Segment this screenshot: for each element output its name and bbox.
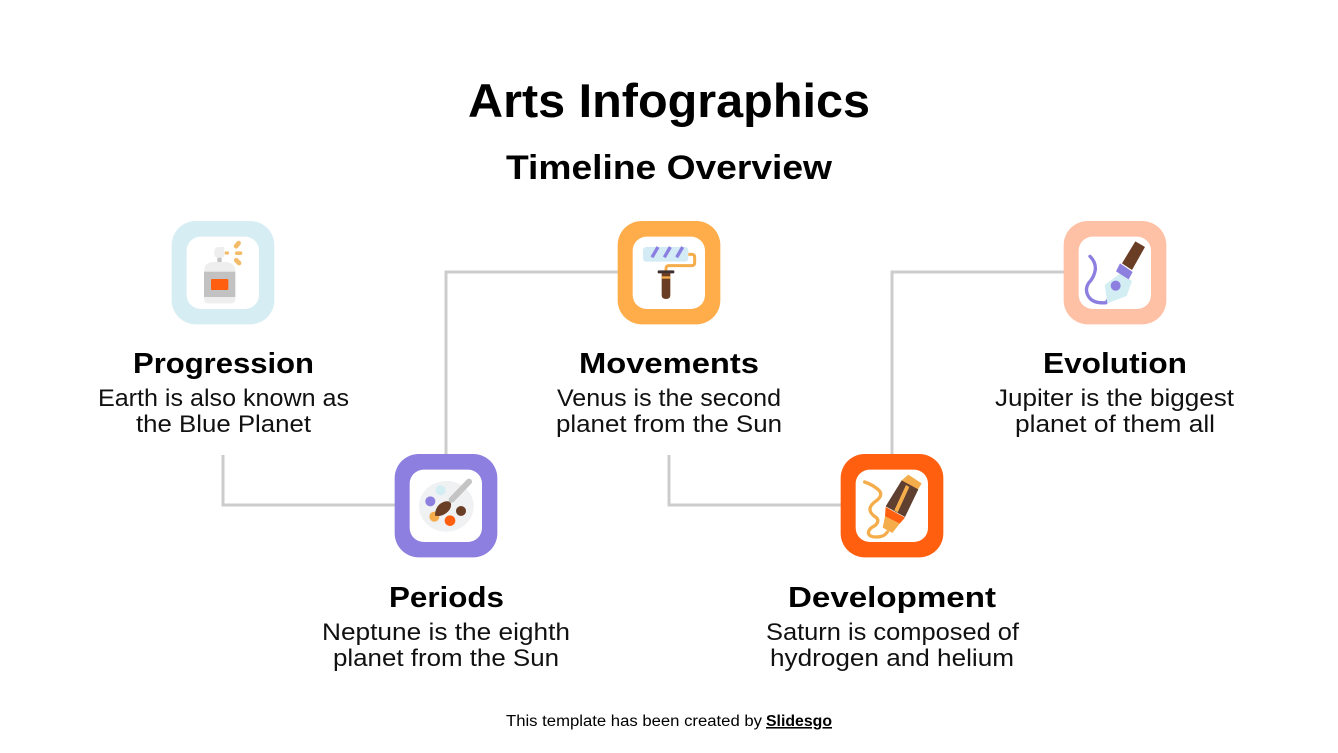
description xyxy=(322,619,570,672)
description: planet of them all xyxy=(1015,411,1215,438)
panel: evolution xyxy=(995,221,1234,438)
description xyxy=(995,385,1234,438)
description: Neptune is the eighth xyxy=(322,619,570,646)
icon: perfume spray bottle xyxy=(172,221,274,324)
description: the Blue Planet xyxy=(136,411,311,438)
description: planet from the Sun xyxy=(333,645,559,672)
description: Earth is also known as xyxy=(98,385,349,412)
description xyxy=(98,385,349,438)
footer credit: This template has been created by xyxy=(506,713,762,730)
panel: periods xyxy=(322,454,570,672)
description: hydrogen and helium xyxy=(770,645,1014,672)
panel: progression xyxy=(98,221,349,438)
heading: Evolution xyxy=(1043,348,1187,380)
connector: periods to movements xyxy=(446,272,619,455)
description: Venus is the second xyxy=(557,385,781,412)
description: Jupiter is the biggest xyxy=(995,385,1234,412)
icon: fountain pen xyxy=(1064,221,1166,324)
connector: progression to periods xyxy=(223,455,396,505)
footer credit: Slidesgo xyxy=(766,713,832,730)
panel: development xyxy=(766,454,1019,672)
icon: artist palette and brush xyxy=(395,454,497,557)
description xyxy=(556,385,782,438)
description: planet from the Sun xyxy=(556,411,782,438)
heading: Progression xyxy=(133,348,314,380)
heading: Development xyxy=(788,582,996,614)
icon: marker pen xyxy=(841,454,943,557)
subtitle: Timeline Overview xyxy=(506,149,833,187)
connector: development to evolution xyxy=(892,272,1065,455)
heading: Movements xyxy=(579,348,759,380)
title: Arts Infographics xyxy=(468,74,870,127)
connector: movements to development xyxy=(669,455,842,505)
icon: paint roller xyxy=(618,221,720,324)
heading: Periods xyxy=(389,582,504,614)
description: Saturn is composed of xyxy=(766,619,1019,646)
description xyxy=(766,619,1019,672)
panel: movements xyxy=(556,221,782,438)
